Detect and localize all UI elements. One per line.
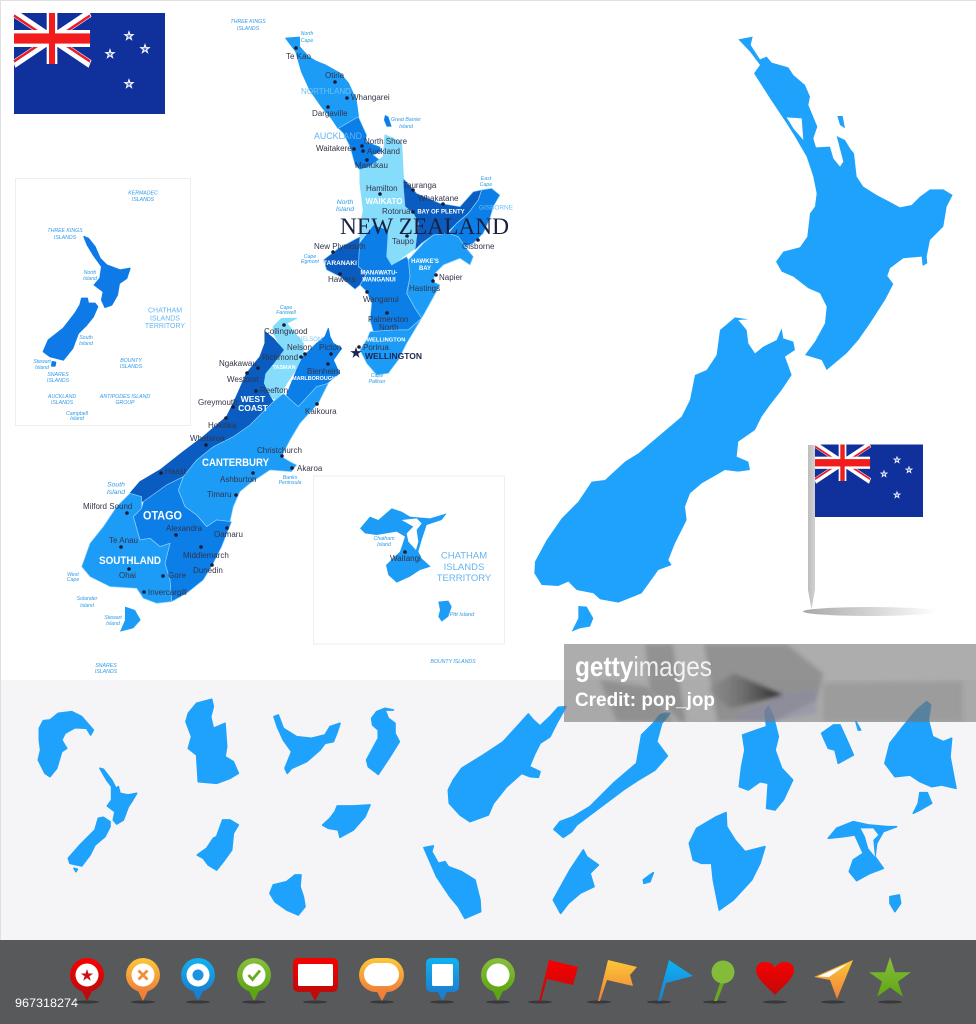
overview map labels: BOUNTY bbox=[120, 358, 142, 364]
city name labels: Middlemarch bbox=[183, 551, 229, 560]
geographic annotations: ISLANDS bbox=[95, 669, 118, 675]
geographic annotations: North bbox=[301, 31, 313, 37]
silhouette: small island bbox=[643, 873, 653, 883]
icon: navigation arrow bbox=[814, 960, 853, 999]
Chatham labels: CHATHAM bbox=[441, 550, 487, 562]
region: Tasman and Nelson bbox=[263, 318, 303, 400]
geographic annotations: THREE KINGS bbox=[230, 19, 266, 25]
silhouette: Marlborough bbox=[553, 850, 598, 913]
region: West Coast bbox=[130, 332, 283, 502]
city name labels: Waitakere bbox=[316, 144, 352, 153]
overview map labels: Island bbox=[70, 416, 85, 422]
icon: green round pin bbox=[712, 960, 734, 1001]
city name labels bbox=[83, 52, 495, 597]
icon: red flag bbox=[539, 960, 578, 1001]
city name labels: Richmond bbox=[262, 353, 298, 362]
silhouette: Waikato bbox=[186, 699, 238, 783]
overview map labels: Island bbox=[35, 365, 50, 371]
geographic annotations: Cape bbox=[480, 182, 492, 188]
city name labels: Picton bbox=[319, 343, 341, 352]
city name labels: Oamaru bbox=[214, 530, 243, 539]
region: Southland bbox=[82, 493, 172, 603]
geographic annotations: Palliser bbox=[368, 379, 386, 385]
region: Wellington bbox=[360, 318, 422, 375]
icon: blue pennant flag bbox=[658, 960, 693, 1001]
city name labels: Otiria bbox=[325, 71, 345, 80]
Chatham labels: TERRITORY bbox=[437, 573, 492, 584]
city name labels: Nelson bbox=[287, 343, 312, 352]
geographic annotations: Farewell bbox=[276, 310, 297, 316]
overview map labels: Stewart bbox=[33, 359, 51, 365]
Chatham labels: ISLANDS bbox=[444, 562, 484, 573]
silhouette: whole country mini map bbox=[68, 768, 137, 872]
silhouette: Hawke's Bay bbox=[689, 813, 765, 910]
overview map labels: GROUP bbox=[115, 400, 135, 406]
flag on pole bbox=[803, 444, 937, 616]
overview map labels: ISLANDS bbox=[54, 235, 77, 241]
city name labels: Hamilton bbox=[366, 184, 398, 193]
city name labels: Collingwood bbox=[264, 327, 308, 336]
region name labels: HAWKE'S bbox=[411, 259, 439, 265]
Chatham labels: Island bbox=[377, 542, 392, 548]
geographic annotations: Cape bbox=[301, 38, 313, 44]
capital marker and label: Wellington bbox=[350, 347, 422, 361]
region name labels: TARANAKI bbox=[323, 260, 357, 267]
silhouette: Pitt Island bbox=[890, 895, 901, 912]
city name labels: Whataroa bbox=[190, 434, 225, 443]
overview map labels: ISLANDS bbox=[120, 364, 143, 370]
city name labels: Tauranga bbox=[403, 181, 437, 190]
icon: blue square pin bbox=[426, 958, 459, 1001]
overview map labels: ISLANDS bbox=[132, 197, 155, 203]
city name labels: Dargaville bbox=[312, 109, 348, 118]
city name labels: Manukau bbox=[355, 161, 388, 170]
geographic annotations: Stewart bbox=[104, 615, 122, 621]
main regional map: South Island bbox=[82, 318, 342, 632]
Stewart Island bbox=[120, 607, 141, 632]
city name labels: Palmerston bbox=[368, 315, 408, 324]
icon: green star bbox=[869, 957, 911, 997]
city name labels: Gore bbox=[168, 571, 186, 580]
city name labels: Taupo bbox=[392, 237, 414, 246]
Great Barrier Island bbox=[384, 115, 392, 127]
city name labels: Greymouth bbox=[198, 398, 238, 407]
overview map labels: TERRITORY bbox=[145, 323, 185, 330]
region name labels: NORTHLAND bbox=[301, 86, 351, 96]
city name labels: Invercargill bbox=[148, 588, 187, 597]
region name labels: GISBORNE bbox=[479, 204, 513, 212]
Chatham labels: Waitangi bbox=[390, 554, 421, 563]
silhouette: Southland bbox=[885, 702, 956, 813]
geographic annotations: Solander bbox=[77, 596, 98, 602]
region: Waikato bbox=[360, 135, 418, 265]
region: Canterbury bbox=[178, 383, 328, 527]
large Stewart Island silhouette bbox=[572, 606, 593, 632]
region name labels: WANGANUI bbox=[362, 278, 396, 284]
region: Auckland bbox=[338, 117, 382, 170]
region name labels: BAY OF PLENTY bbox=[417, 210, 465, 216]
region silhouettes, left half bbox=[38, 699, 481, 918]
region: Northland bbox=[286, 37, 358, 128]
region: Marlborough bbox=[287, 328, 342, 407]
city name labels: Hawera bbox=[328, 275, 356, 284]
city name labels: Blenheim bbox=[307, 367, 341, 376]
label: Bounty Islands: BOUNTY ISLANDS bbox=[430, 659, 476, 665]
geographic annotations: Great Barrier bbox=[391, 117, 421, 123]
overview map labels: KERMADEC bbox=[128, 190, 158, 196]
capital marker and label: Wellington: WELLINGTON bbox=[365, 351, 422, 361]
region: Taranaki bbox=[323, 237, 367, 289]
silhouette: Otago bbox=[739, 707, 793, 810]
city name labels: Napier bbox=[439, 273, 463, 282]
region: Hawke's Bay bbox=[407, 233, 473, 318]
large North Island silhouette bbox=[738, 37, 953, 370]
overview map labels: Island bbox=[79, 341, 94, 347]
icon: orange cross pin bbox=[126, 958, 160, 1001]
silhouette: Manawatu bbox=[197, 820, 238, 870]
region name labels: MANAWATU- bbox=[361, 270, 397, 276]
city name labels: Whangarei bbox=[351, 93, 390, 102]
region name labels: SOUTHLAND bbox=[99, 555, 161, 567]
city dots bbox=[119, 46, 480, 594]
icon: green ring pin bbox=[481, 958, 515, 1001]
city name labels: Hastings bbox=[409, 284, 440, 293]
geographic annotations: Egmont bbox=[301, 259, 319, 265]
city name labels: Te Anau bbox=[109, 536, 138, 545]
Chatham labels: Pitt Island bbox=[450, 612, 475, 618]
city name labels: Wanganui bbox=[363, 295, 399, 304]
overview map labels: Island bbox=[83, 276, 98, 282]
city name labels: Porirua bbox=[363, 343, 389, 352]
geographic annotations: Island bbox=[399, 124, 414, 130]
overview map labels bbox=[33, 190, 185, 422]
geographic annotations: SNARES bbox=[95, 663, 117, 669]
Chatham labels: Chatham bbox=[373, 536, 395, 542]
city name labels: Haast bbox=[165, 467, 187, 476]
region: Manawatu-Wanganui bbox=[357, 225, 422, 332]
region name labels: WEST bbox=[241, 394, 266, 404]
icon: red star pin bbox=[70, 958, 104, 1001]
geographic annotations: Cape bbox=[371, 373, 383, 379]
overview map labels: SNARES bbox=[47, 372, 69, 378]
silhouette panel background bbox=[0, 680, 976, 940]
main regional map: North Island bbox=[286, 37, 500, 375]
city name labels: Ashburton bbox=[220, 475, 256, 484]
silhouette: West Coast bbox=[554, 713, 670, 837]
city name labels: Rotorua bbox=[382, 207, 411, 216]
region name labels: COAST bbox=[238, 403, 269, 413]
watermark overlay bbox=[564, 644, 976, 722]
region name labels bbox=[99, 86, 513, 567]
silhouette: Chatham Islands bbox=[828, 822, 897, 881]
city name labels: Kaikoura bbox=[305, 407, 337, 416]
geographic annotations: East bbox=[481, 176, 492, 182]
watermark credit text: Credit: pop_jop bbox=[575, 690, 715, 711]
geographic annotations: Banks bbox=[283, 475, 298, 481]
region name labels: AUCKLAND bbox=[314, 131, 362, 141]
overview map labels: South bbox=[79, 335, 93, 341]
icon: red heart bbox=[756, 962, 794, 995]
icon: green check pin bbox=[237, 958, 271, 1001]
city name labels: Timaru bbox=[207, 490, 232, 499]
shadows below icons bbox=[75, 1000, 902, 1004]
geographic annotations: South bbox=[107, 482, 125, 488]
icon: orange flag bbox=[598, 960, 637, 1001]
city name labels: Gisborne bbox=[462, 242, 495, 251]
overview map labels: ISLANDS bbox=[51, 400, 74, 406]
region name labels: MARLBOROUGH bbox=[292, 376, 336, 382]
city name labels: New Plymouth bbox=[314, 242, 366, 251]
overview map labels: ISLANDS bbox=[47, 378, 70, 384]
city name labels: Alexandra bbox=[166, 524, 203, 533]
city name labels: North Shore bbox=[364, 137, 408, 146]
geographic annotations: Peninsula bbox=[279, 480, 302, 486]
icon: orange rounded pin bbox=[359, 958, 404, 1001]
city name labels: Reefton bbox=[260, 386, 288, 395]
region: Otago bbox=[133, 477, 232, 602]
icon: blue ring pin bbox=[181, 958, 215, 1001]
geographic annotations: Island bbox=[107, 489, 125, 496]
city name labels: North bbox=[379, 323, 399, 332]
region name labels: WELLINGTON bbox=[367, 338, 405, 344]
Chatham labels bbox=[373, 536, 492, 618]
silhouette: Auckland bbox=[367, 708, 399, 774]
geographic annotations bbox=[67, 19, 492, 675]
geographic annotations: Island bbox=[106, 621, 121, 627]
city name labels: Auckland bbox=[367, 147, 400, 156]
geographic annotations: Cape bbox=[280, 305, 292, 311]
city name labels: Westport bbox=[227, 375, 260, 384]
icon bar background bbox=[0, 940, 976, 1024]
city name labels: Whakatane bbox=[418, 194, 459, 203]
New Zealand flag, top left bbox=[14, 13, 165, 114]
geographic annotations: Cape bbox=[67, 577, 79, 583]
icon: red rectangular pin bbox=[293, 958, 338, 1001]
watermark logo text: gettyimages bbox=[575, 651, 712, 682]
region: Gisborne bbox=[448, 188, 500, 247]
city name labels: Hokitika bbox=[208, 421, 237, 430]
overview map labels: ANTIPODES ISLAND bbox=[99, 394, 150, 400]
silhouette: Tasman bbox=[822, 722, 861, 763]
overview map labels: North bbox=[84, 270, 96, 276]
city name labels: Christchurch bbox=[257, 446, 302, 455]
city name labels: Te Kao bbox=[286, 52, 311, 61]
city name labels: Dunedin bbox=[193, 566, 223, 575]
geographic annotations: West bbox=[67, 572, 79, 578]
geographic annotations: Cape bbox=[304, 254, 316, 260]
overview map labels: Campbell bbox=[66, 411, 89, 417]
silhouette: Northland bbox=[38, 712, 93, 777]
city name labels: Akaroa bbox=[297, 464, 323, 473]
city name labels: Ohai bbox=[119, 571, 136, 580]
image id number: 967318274 bbox=[15, 996, 78, 1010]
inset panel: Chatham Islands bbox=[314, 476, 504, 644]
region: Bay of Plenty bbox=[403, 178, 482, 250]
inset panel: whole country overview bbox=[16, 178, 190, 426]
city name labels: Milford Sound bbox=[83, 502, 132, 511]
city name labels: Ngakawau bbox=[219, 359, 257, 368]
region silhouettes, right half bbox=[448, 702, 956, 913]
silhouette: Taranaki bbox=[270, 875, 305, 915]
region name labels: TASMAN bbox=[272, 365, 296, 371]
geographic annotations: ISLANDS bbox=[237, 26, 260, 32]
silhouette: Bay of Plenty bbox=[274, 715, 340, 773]
overview map labels: ISLANDS bbox=[150, 316, 180, 322]
region name labels: NELSON bbox=[298, 336, 322, 343]
overview map islands bbox=[43, 237, 130, 366]
geographic annotations: North bbox=[337, 199, 354, 206]
overview map labels: AUCKLAND bbox=[47, 394, 76, 400]
silhouette: Canterbury bbox=[448, 707, 566, 822]
overview map labels: THREE KINGS bbox=[47, 228, 83, 234]
region name labels: OTAGO bbox=[143, 508, 182, 522]
overview map labels: CHATHAM bbox=[148, 308, 182, 314]
large South Island silhouette bbox=[534, 317, 795, 632]
map title: NEW ZEALAND bbox=[340, 214, 509, 239]
silhouette: Gisborne bbox=[323, 805, 370, 837]
region name labels: CANTERBURY bbox=[202, 457, 270, 469]
silhouette: Northland coast bbox=[424, 846, 481, 918]
geographic annotations: Island bbox=[80, 603, 95, 609]
region name labels: WAIKATO bbox=[365, 197, 403, 206]
Chatham Island shape bbox=[360, 508, 452, 622]
geographic annotations: Island bbox=[336, 206, 354, 213]
region name labels: BAY bbox=[419, 266, 431, 272]
